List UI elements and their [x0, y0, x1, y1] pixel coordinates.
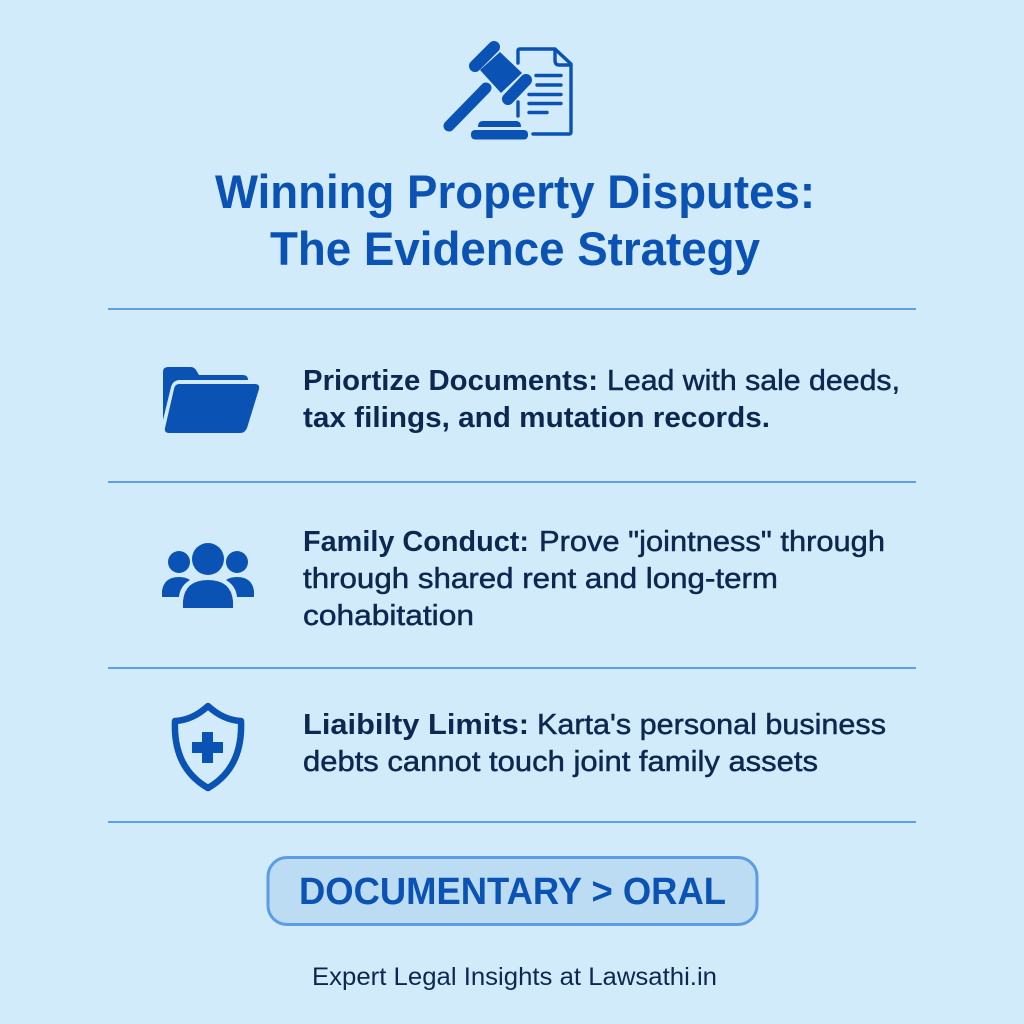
icon: people [162, 543, 254, 608]
text: prioritize documents: Lead with sale deeds, [607, 365, 900, 397]
callout: documentary greater than oral: DOCUMENTARY > ORAL [299, 871, 726, 913]
text: prioritize documents: tax filings, and mutation records. [303, 402, 770, 434]
text: liability limits [303, 709, 886, 778]
text: prioritize documents [303, 365, 900, 434]
callout: documentary greater than oral [268, 858, 757, 924]
row: family conduct [162, 526, 885, 632]
footer text: Expert Legal Insights at Lawsathi.in [312, 963, 717, 991]
text: family conduct: Family Conduct: [303, 526, 529, 558]
text: liability limits: Liaibilty Limits: [303, 709, 529, 741]
title: The Evidence Strategy [270, 222, 760, 275]
row: liability limits [175, 706, 886, 788]
icon: gavel and document [449, 47, 571, 140]
text: prioritize documents: Priortize Documents: [303, 365, 598, 397]
text: family conduct: cohabitation [303, 600, 474, 632]
text: family conduct: through shared rent and long-term [303, 563, 778, 595]
text: liability limits: debts cannot touch joint family assets [303, 746, 818, 778]
text: family conduct [303, 526, 885, 632]
row: prioritize documents [163, 365, 900, 434]
title: Winning Property Disputes: [215, 165, 815, 218]
title [215, 165, 815, 275]
icon: shield with cross [175, 706, 241, 788]
text: liability limits: Karta's personal business [537, 709, 886, 741]
text: family conduct: Prove "jointness" through [539, 526, 885, 558]
icon: folder [163, 367, 259, 433]
